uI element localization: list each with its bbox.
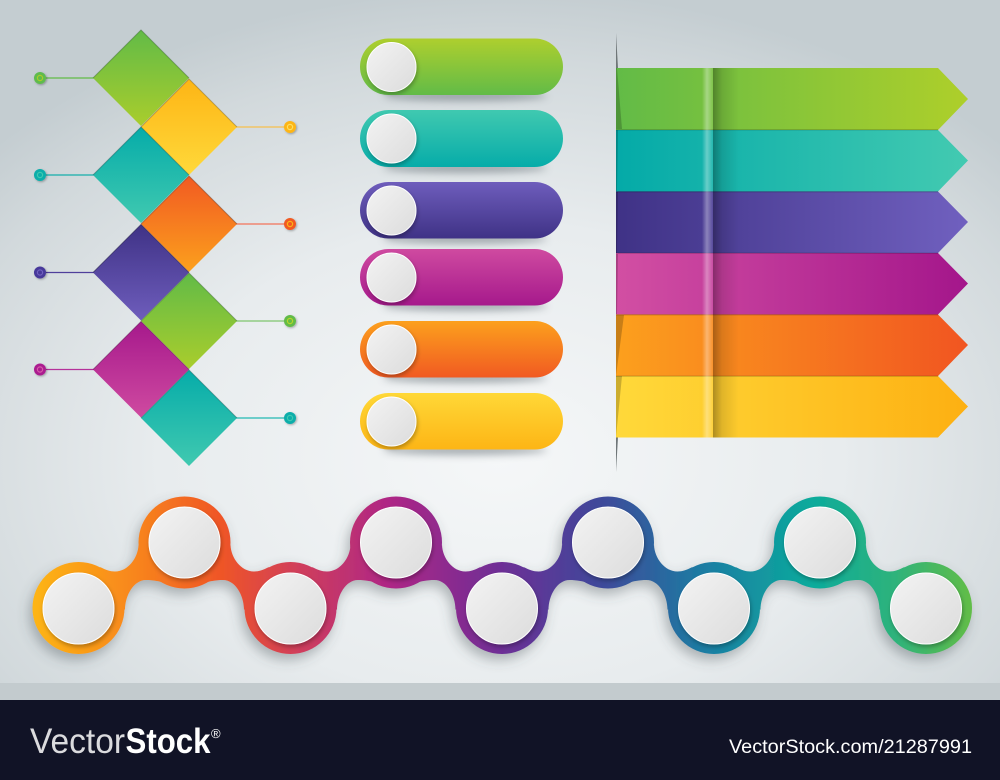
arrow 3 purple xyxy=(616,192,968,253)
pill 1 green xyxy=(360,38,563,101)
chain band xyxy=(32,496,972,654)
panel: pill buttons xyxy=(360,38,563,455)
diamond 8 teal xyxy=(141,370,237,466)
diamond 7 magenta xyxy=(93,322,189,418)
diamond 5 purple xyxy=(93,224,189,320)
footer bar xyxy=(0,700,1000,780)
arrow 4 magenta xyxy=(616,253,968,314)
diamond 4 orange xyxy=(141,176,237,272)
arrow 2 teal xyxy=(616,130,968,192)
pill 6 yellow xyxy=(360,393,563,455)
pill 2 teal xyxy=(360,110,563,173)
pill 4 magenta xyxy=(360,249,563,311)
panel: diamond steps xyxy=(34,30,296,466)
diamond 1 green xyxy=(93,30,189,126)
arrow 6 yellow xyxy=(616,376,968,438)
diamond 2 yellow xyxy=(141,79,237,175)
pill 3 purple xyxy=(360,182,563,244)
logo: Vector xyxy=(30,722,125,761)
diamond 3 teal xyxy=(93,127,189,223)
panel: folded arrow ribbons xyxy=(616,33,968,472)
diamond 6 green xyxy=(141,273,237,369)
white discs xyxy=(43,507,962,644)
logo: Stock xyxy=(126,722,211,761)
fold highlight and shadow xyxy=(616,68,739,438)
ribbon seams xyxy=(616,129,938,377)
arrow 1 green xyxy=(616,68,968,130)
connector lines and dots xyxy=(34,72,296,424)
logo: ® xyxy=(211,726,221,741)
panel: circle chain timeline xyxy=(32,496,972,654)
image id: VectorStock.com/21287991 xyxy=(729,737,972,758)
arrow 5 orange xyxy=(616,314,968,376)
logo xyxy=(30,722,221,761)
pill 5 orange xyxy=(360,321,563,383)
